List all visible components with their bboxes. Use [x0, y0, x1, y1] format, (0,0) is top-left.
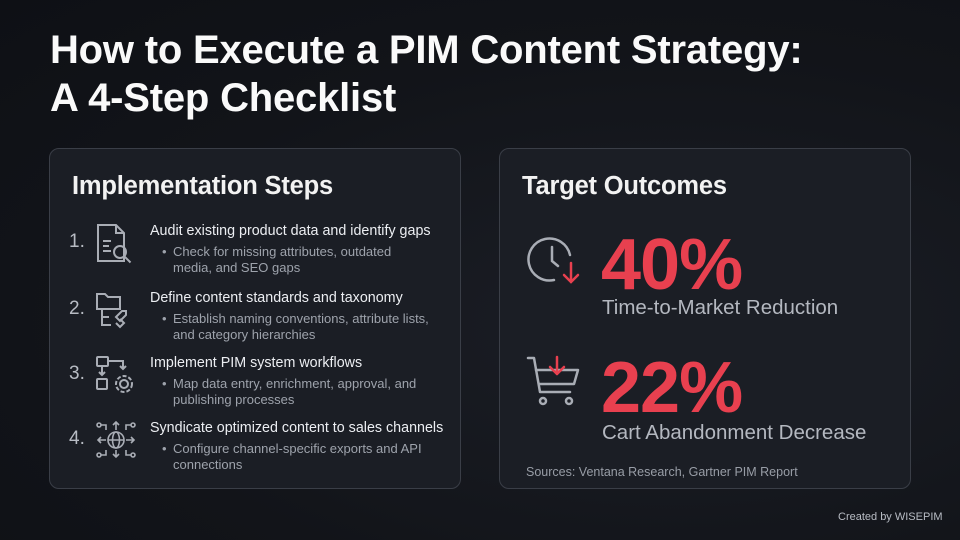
- step 4: [69, 420, 443, 472]
- step 2: [69, 290, 429, 342]
- label: cart abandonment: Cart Abandonment Decrease: [602, 421, 866, 444]
- step 1: Check for missing attributes, outdated media, and SEO gaps: [173, 244, 391, 275]
- label: time-to-market: Time-to-Market Reduction: [602, 296, 838, 319]
- step 1: 1.: [69, 231, 85, 252]
- step 4: 4.: [69, 428, 85, 449]
- sources: Sources: Ventana Research, Gartner PIM Report: [526, 465, 798, 479]
- step 1: Audit existing product data and identify gaps: [150, 223, 431, 239]
- step 3: Implement PIM system workflows: [150, 355, 362, 371]
- credit: Created by WISEPIM: [838, 511, 943, 523]
- step 2: Define content standards and taxonomy: [150, 290, 403, 306]
- step 3: Map data entry, enrichment, approval, and publishing processes: [173, 376, 416, 407]
- title: How to Execute a PIM Content Strategy:: [50, 28, 802, 72]
- step 4: Configure channel-specific exports and API connections: [173, 441, 422, 472]
- icon: workflow gear: [96, 356, 133, 393]
- icon: cart down: [526, 356, 580, 406]
- heading: implementation steps: Implementation Steps: [72, 172, 333, 200]
- title: [50, 28, 802, 120]
- step 3: 3.: [69, 363, 85, 384]
- step 4: Syndicate optimized content to sales channels: [150, 420, 443, 436]
- panel: target outcomes: [499, 148, 911, 489]
- step 2: Establish naming conventions, attribute lists, and category hierarchies: [173, 311, 429, 342]
- icon: folder tag: [96, 293, 127, 328]
- step 2: 2.: [69, 298, 85, 319]
- step 1: [69, 223, 431, 275]
- stat: 22%: 22%: [601, 348, 742, 428]
- step 3: [69, 355, 416, 407]
- heading: target outcomes: Target Outcomes: [522, 172, 727, 200]
- icon: globe network: [96, 421, 136, 458]
- panel: implementation steps: [49, 148, 461, 489]
- icon: document search: [97, 224, 132, 264]
- icon: clock down: [527, 237, 580, 284]
- stat: 40%: 40%: [601, 225, 742, 305]
- title: A 4-Step Checklist: [50, 76, 396, 120]
